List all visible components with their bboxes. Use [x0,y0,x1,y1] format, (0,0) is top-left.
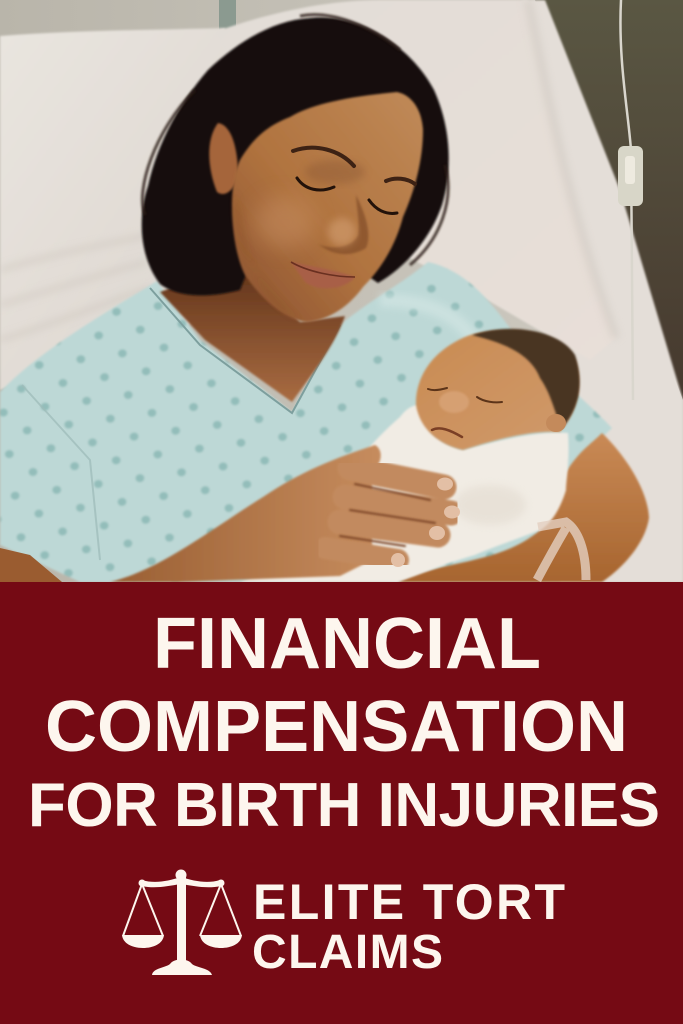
gown neckline trim [150,288,340,413]
icon: scales of justice [122,870,242,975]
right pillow [215,0,616,360]
blanket shading [454,485,526,525]
nose shadow [318,195,368,254]
right arm [398,433,649,582]
logo text line 1: ELITE TORT [253,874,565,930]
lip line [291,262,355,277]
nose highlight [328,218,356,246]
blanket [240,405,569,582]
dark room corner [535,0,683,400]
gown [0,262,612,582]
ear [209,123,238,194]
hair [142,17,449,295]
banner background [0,582,683,1024]
forearm and mother's hand [110,445,381,582]
iv tube and clamp [618,0,643,400]
left pillow [0,28,260,390]
gown sleeve seam [22,385,100,560]
iv tape on arm [537,522,586,580]
fingers [325,468,451,560]
title line 1: FINANCIAL [153,604,541,684]
hair loose strands [142,15,448,265]
right eyebrow [386,179,415,184]
chest and neck [160,262,345,402]
baby closed eye left [428,388,447,390]
left eyebrow [293,148,354,166]
baby nose [439,391,469,413]
bed sheet [522,0,683,582]
fingernails [391,478,460,567]
pillow edge shadow [528,0,616,338]
logo text line 2: CLAIMS [252,926,443,979]
left eye [297,178,334,190]
left pillow folds [0,235,150,340]
baby head [416,330,579,450]
title [28,604,660,840]
finger gaps [340,484,435,546]
baby closed eye right [477,397,502,402]
left arm [0,548,62,582]
photo: mother holding newborn in hospital bed [0,0,683,582]
jaw shadow [236,190,300,320]
wall background [0,0,683,582]
face [232,92,423,322]
logo [122,870,565,979]
title line 3: FOR BIRTH INJURIES [28,771,660,840]
title line 2: COMPENSATION [45,687,628,767]
baby ear [546,414,566,432]
cheek highlight [255,196,315,248]
baby hair [472,329,580,428]
iv pole behind pillow [219,0,236,30]
right eye [369,200,397,213]
eye socket shadow [305,160,365,184]
gown fold highlight [380,300,480,350]
baby mouth [432,428,462,437]
lips [291,262,355,288]
